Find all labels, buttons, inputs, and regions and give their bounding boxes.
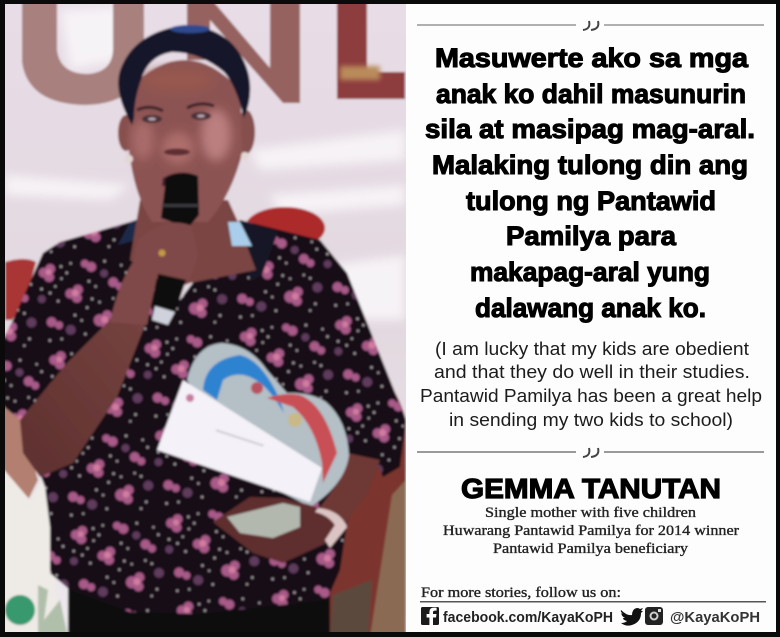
blouse floral — [0, 220, 406, 614]
text: facebook address: facebook.com/KayaKoPH — [443, 610, 613, 626]
text block: English translation: (I am lucky that my kids are obedient — [435, 339, 749, 359]
eyes and brows — [137, 107, 163, 111]
panel: white quote panel — [406, 4, 776, 632]
person in white at left edge — [5, 404, 68, 632]
social links row — [421, 607, 760, 626]
rule above social links — [420, 601, 766, 602]
headline: Tagalog quote: dalawang anak ko. — [475, 293, 706, 323]
name heading: GEMMA TANUTAN — [461, 473, 721, 504]
headline: Tagalog quote: Malaking tulong din ang — [432, 150, 748, 180]
headline: Tagalog quote — [425, 43, 755, 323]
award plaque — [187, 343, 349, 507]
earrings — [125, 155, 133, 163]
headline: Tagalog quote: Masuwerte ako sa mga — [435, 43, 749, 73]
text: follow us prompt: For more stories, follow us on: — [421, 585, 621, 601]
microphone — [152, 173, 199, 325]
text block: description: Huwarang Pantawid Pamilya for 2014 winner — [443, 523, 739, 539]
collar strap — [243, 222, 278, 282]
photo backdrop — [0, 0, 410, 637]
arm and hand holding microphone — [20, 223, 198, 477]
text block: description: Pantawid Pamilya beneficiary — [493, 541, 689, 557]
background people in red — [5, 207, 406, 637]
right forearm — [318, 453, 380, 527]
ears — [118, 115, 134, 151]
text block: English translation: and that they do well in their studies. — [434, 362, 750, 382]
neck and chest — [130, 200, 256, 290]
icon: instagram — [645, 607, 663, 625]
divider: lower with musical note ornament — [417, 448, 764, 457]
icon: twitter — [621, 608, 643, 626]
hand with cash and watch — [213, 497, 347, 563]
headline: Tagalog quote: tulong ng Pantawid — [466, 186, 716, 216]
text block: English translation: Pantawid Pamilya has been a great help — [420, 386, 762, 406]
nose and mouth — [164, 148, 190, 156]
trousers — [66, 587, 332, 632]
backdrop sheen — [5, 5, 405, 320]
text block: English translation: in sending my two kids to school) — [449, 410, 733, 430]
face — [128, 60, 243, 222]
text block: description — [443, 505, 739, 557]
headline: Tagalog quote: anak ko dahil masunurin — [436, 79, 746, 109]
hair — [118, 25, 250, 125]
envelope — [157, 380, 322, 502]
divider: top with musical note ornament — [417, 21, 764, 30]
headline: Tagalog quote: sila at masipag mag-aral. — [425, 114, 755, 144]
head — [118, 25, 255, 222]
panel: photo of Gemma Tanutan speaking — [0, 0, 410, 637]
headline: Tagalog quote: Pamilya para — [506, 221, 677, 251]
banner letters — [22, 0, 405, 105]
headline: Tagalog quote: makapag-aral yung — [470, 257, 710, 287]
text block: description: Single mother with five children — [485, 505, 697, 521]
text block: English translation — [420, 339, 762, 430]
text: social handle: @KayaKoPH — [670, 610, 760, 626]
icon: facebook — [421, 607, 439, 625]
